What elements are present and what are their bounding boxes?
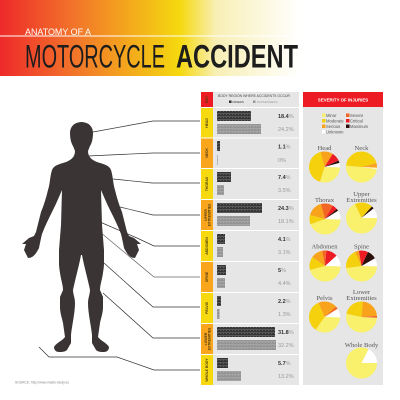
row: lower extremities: 32.2%: [278, 343, 294, 349]
row: head: HEAD: [205, 118, 209, 128]
row: spine: 5%: [278, 268, 286, 274]
row: thorax: THORAX: [205, 176, 209, 191]
row: spine: [201, 262, 299, 292]
row: neck: 0%: [278, 158, 286, 164]
severity legend: [322, 113, 369, 134]
row: head: 24.2%: [278, 127, 294, 133]
source note: SOURCE: http://www.maids-study.eu: [15, 380, 69, 384]
pie: head: [314, 145, 335, 178]
header banner: [0, 0, 300, 76]
row: spine: SPINE: [205, 271, 209, 282]
row: whole body: [201, 355, 299, 385]
row: lower extremities: 31.8%: [278, 330, 294, 336]
pie: head: Head: [318, 145, 332, 152]
panel heading: [303, 92, 383, 107]
row: neck: [201, 138, 299, 168]
row: upper extremities: EXTREMITIES: [208, 203, 212, 226]
row: whole body: 13.2%: [278, 374, 294, 380]
row: pelvis: [201, 293, 299, 323]
pie: thorax: Thorax: [315, 197, 335, 204]
leader lines from body to table rows: [39, 121, 200, 370]
severity legend: Moderate: [326, 118, 344, 124]
row: abdomen: 3.1%: [278, 250, 291, 256]
pie: lower extremities: [346, 289, 377, 326]
row: upper extremities: [201, 200, 299, 230]
severity legend: Serious: [326, 124, 340, 129]
table header: [201, 92, 299, 107]
table header: PASSENGERS: [257, 100, 277, 104]
pie: spine: [351, 244, 372, 277]
row: abdomen: [201, 231, 299, 261]
pie: thorax: [314, 197, 336, 230]
severity legend: Critical: [350, 118, 363, 124]
severity legend: Minor: [326, 113, 337, 118]
row: abdomen: ABDOMEN: [205, 237, 209, 255]
table header: RIDERS: [232, 100, 244, 104]
pie: neck: [352, 145, 371, 176]
row: abdomen: 4.1%: [278, 237, 291, 243]
row: spine: 4.4%: [278, 281, 291, 287]
pie: upper extremities: Extremities: [346, 197, 377, 204]
row: pelvis: 2.2%: [278, 299, 291, 305]
pie: spine: Spine: [354, 244, 369, 250]
severity legend: Severe: [350, 113, 364, 118]
pie: lower extremities: Lower: [353, 289, 371, 296]
panel: severity of injuries: [303, 92, 383, 385]
pie: neck: Neck: [355, 145, 369, 152]
row: head: 18.4%: [278, 114, 294, 120]
row: pelvis: PELVIS: [205, 301, 209, 314]
pie: abdomen: [311, 244, 338, 277]
row: lower extremities: LOWER: [204, 332, 208, 345]
row: upper extremities: UPPER: [204, 209, 208, 221]
pie: pelvis: Pelvis: [316, 295, 333, 302]
pie: lower extremities: Extremities: [346, 295, 377, 302]
pie: abdomen: Abdomen: [311, 244, 338, 250]
pie: whole body: [345, 342, 379, 373]
row: lower extremities: [201, 324, 299, 354]
row: upper extremities: 18.1%: [278, 219, 294, 225]
row: neck: 1.1%: [278, 144, 291, 150]
table header: BODY REGION WHERE ACCIDENTS OCCUR: [218, 93, 290, 98]
pie: upper extremities: [346, 191, 377, 229]
row: thorax: 7.4%: [278, 175, 291, 181]
pie: whole body: Whole Body: [345, 342, 379, 349]
pie: upper extremities: Upper: [353, 191, 371, 198]
title: ANATOMY OF A: [25, 27, 92, 38]
row: pelvis: 1.3%: [278, 312, 291, 318]
row: whole body: WHOLE BODY: [205, 358, 209, 382]
panel heading: SEVERITY OF INJURIES: [318, 98, 368, 102]
row: thorax: 3.5%: [278, 188, 291, 194]
row: lower extremities: EXTREMITIES: [208, 327, 212, 350]
row: whole body: 5.7%: [278, 361, 291, 367]
pie: pelvis: [314, 295, 335, 328]
title: MOTORCYCLE: [25, 38, 165, 74]
row: thorax: [201, 169, 299, 199]
severity legend: Unknown: [326, 130, 344, 134]
row: head: [201, 108, 299, 138]
row: neck: NECK: [205, 148, 209, 158]
table header: KEY: [205, 95, 209, 103]
severity legend: Maximum: [350, 124, 369, 129]
title: [25, 27, 298, 74]
row: upper extremities: 24.3%: [278, 206, 294, 212]
human body silhouette: [22, 122, 141, 352]
title: ACCIDENT: [176, 38, 298, 74]
